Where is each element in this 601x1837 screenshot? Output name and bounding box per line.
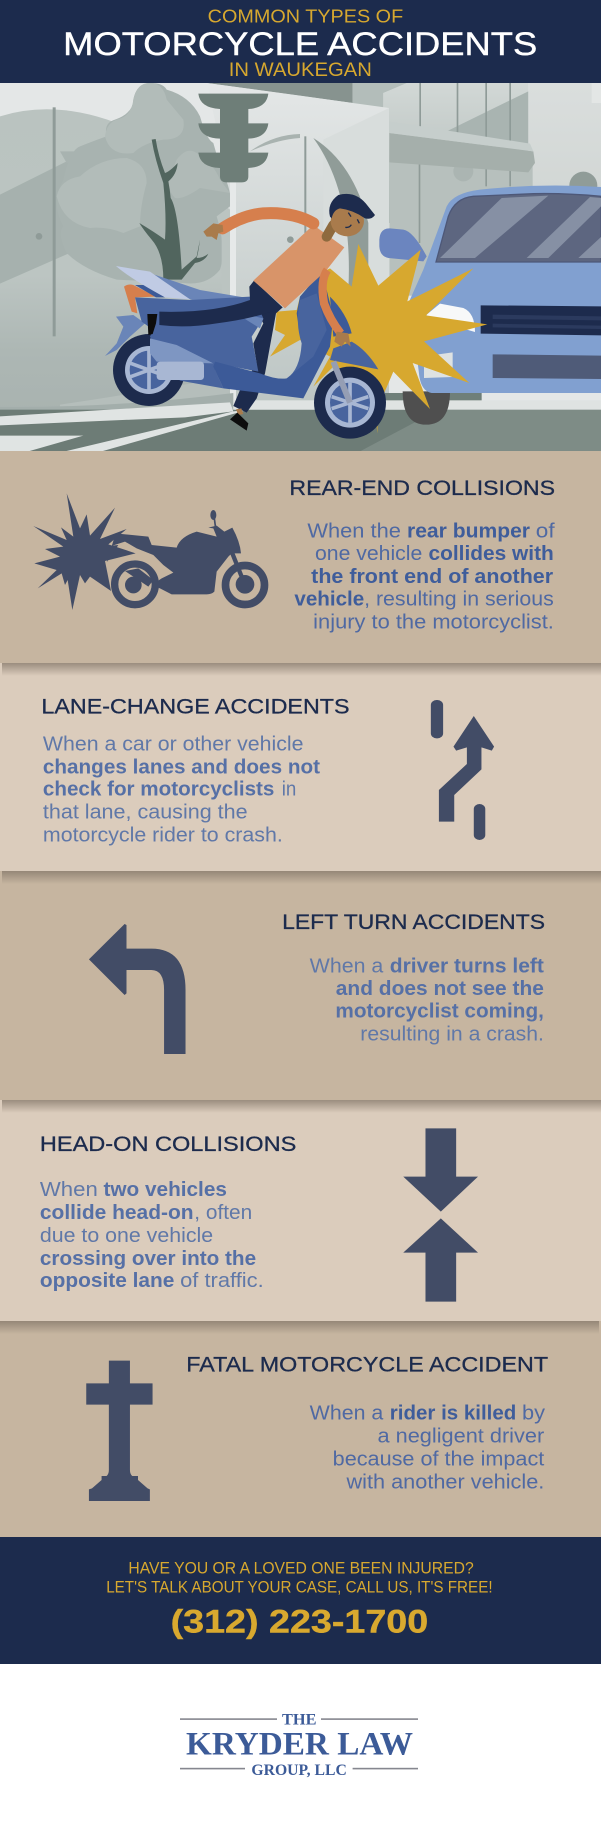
text block [310, 1402, 545, 1493]
panel: head-on collisions [0, 1100, 601, 1321]
text block: changes lanes and does not [43, 756, 320, 778]
text block: by [522, 1402, 545, 1424]
text block [294, 520, 555, 633]
text block: two vehicles [104, 1179, 227, 1201]
text block: injury to the motorcyclist. [313, 611, 554, 633]
panel: fatal motorcycle accident [0, 1321, 601, 1537]
text block: due to one vehicle [40, 1225, 213, 1247]
heading: REAR-END COLLISIONS [289, 477, 555, 500]
text block [43, 734, 320, 847]
text block: with another vehicle. [345, 1471, 544, 1493]
icon: motorcycle with burst [33, 493, 264, 610]
text block: driver turns left [390, 955, 544, 977]
text block: rear bumper [407, 520, 530, 542]
heading: LEFT TURN ACCIDENTS [282, 911, 545, 934]
text block: because of the impact [333, 1448, 545, 1470]
text block: , often [194, 1202, 252, 1224]
text block: When [40, 1179, 98, 1201]
rider torso [253, 225, 344, 308]
header band [0, 0, 601, 83]
logo: the kryder law group: KRYDER LAW [186, 1726, 413, 1762]
text block [310, 955, 544, 1045]
text block: When a [310, 1402, 384, 1424]
text block: When a car or other vehicle [43, 734, 304, 756]
heading: LANE-CHANGE ACCIDENTS [41, 695, 350, 718]
text block: , resulting in serious [364, 588, 554, 610]
text block: collides with [428, 543, 554, 565]
text block: motorcyclist coming, [335, 1000, 544, 1022]
background: street and buildings [0, 83, 601, 451]
logo: the kryder law group: GROUP, LLC [251, 1762, 347, 1779]
text block: opposite lane [40, 1270, 174, 1292]
text block: crossing over into the [40, 1248, 256, 1270]
text block: When the [307, 520, 401, 542]
icon: grave cross [86, 1361, 153, 1501]
logo: the kryder law group [180, 1711, 418, 1779]
motorcycle and rider [105, 194, 386, 439]
text block: the front end of another [311, 566, 553, 588]
rider leg [159, 281, 283, 326]
phone number: (312) 223-1700 [171, 1603, 428, 1639]
text block: that lane, causing the [43, 802, 248, 824]
panel: lane-change accidents [0, 663, 601, 871]
text block: vehicle [294, 588, 364, 610]
icon: opposing arrows [403, 1128, 478, 1302]
text block: of traffic. [180, 1270, 264, 1292]
explosion star [270, 244, 487, 433]
traffic light [198, 94, 268, 182]
front wheel [314, 367, 386, 439]
text block: rider is killed [390, 1402, 516, 1424]
text block: check for motorcyclists [43, 778, 274, 800]
text block [40, 1179, 264, 1292]
text block: motorcycle rider to crash. [43, 825, 283, 847]
text block: and does not see the [336, 978, 544, 1000]
rear wheel [113, 334, 185, 406]
panel: call to action [0, 1537, 601, 1664]
text block: resulting in a crash. [360, 1023, 544, 1045]
illustration: motorcycle crash scene [0, 83, 601, 451]
icon: lane change arrow [431, 700, 494, 840]
tree [57, 83, 231, 284]
text: call us: LET'S TALK ABOUT YOUR CASE, CALL US, IT'S FREE! [106, 1578, 493, 1596]
panel: rear-end collisions [0, 451, 601, 663]
title: motorcycle accidents: MOTORCYCLE ACCIDENTS [63, 26, 537, 62]
road [0, 376, 601, 451]
panel: left turn accidents [0, 871, 601, 1100]
text block: a negligent driver [378, 1426, 545, 1448]
car [379, 185, 601, 425]
icon: left turn arrow [89, 924, 186, 1054]
text: injured question: HAVE YOU OR A LOVED ONE BEEN INJURED? [128, 1559, 474, 1577]
heading: common types of: COMMON TYPES OF [208, 6, 403, 27]
heading: in waukegan: IN WAUKEGAN [229, 60, 372, 81]
text block: collide head-on [40, 1202, 194, 1224]
heading: FATAL MOTORCYCLE ACCIDENT [186, 1354, 548, 1377]
rider head [327, 194, 375, 237]
text block: one vehicle [315, 543, 422, 565]
rider far leg [233, 300, 283, 413]
logo: the kryder law group: THE [282, 1711, 316, 1728]
text block: in [282, 778, 296, 800]
rider arms [203, 213, 351, 347]
text block: When a [310, 955, 384, 977]
heading: HEAD-ON COLLISIONS [40, 1133, 296, 1156]
text block: of [536, 520, 555, 542]
